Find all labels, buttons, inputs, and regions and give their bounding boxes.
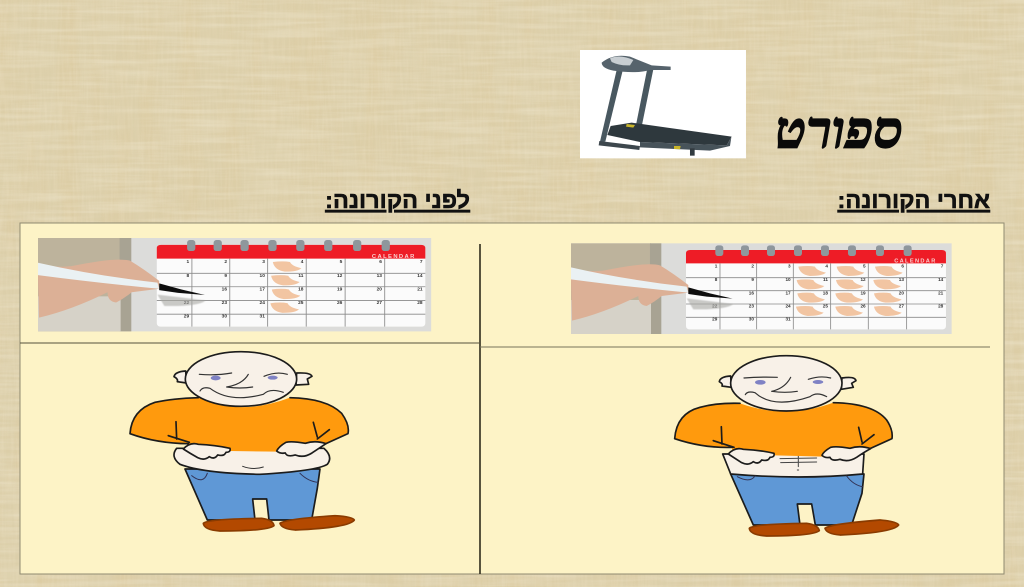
ears bbox=[719, 376, 731, 387]
calendar: after corona, many marked days: 13 bbox=[899, 277, 904, 282]
calendar: before corona, few marked days: 8 bbox=[186, 273, 189, 279]
calendar: after corona, many marked days: 29 bbox=[712, 317, 718, 322]
figure: man after corona, slim with abs bbox=[675, 356, 899, 536]
calendar: before corona, few marked days: 12 bbox=[337, 273, 343, 279]
calendar: before corona, few marked days: 4 bbox=[301, 259, 304, 265]
calendar: before corona, few marked days: 1 bbox=[186, 259, 189, 265]
calendar: before corona, few marked days: 7 bbox=[420, 259, 423, 265]
calendar: after corona, many marked days: 26 bbox=[860, 304, 866, 309]
heading: before corona: לפני הקורונה: bbox=[325, 187, 470, 213]
calendar: after corona, many marked days: 20 bbox=[899, 290, 904, 295]
calendar: after corona, many marked days: 10 bbox=[785, 277, 791, 282]
calendar: before corona, few marked days: 11 bbox=[298, 273, 304, 279]
calendar: after corona, many marked days: 7 bbox=[941, 264, 944, 269]
calendar: after corona, many marked days: 18 bbox=[823, 290, 828, 295]
calendar: before corona, few marked days: 2 bbox=[224, 259, 227, 265]
ears bbox=[174, 371, 187, 383]
calendar: before corona, few marked days: 27 bbox=[377, 300, 382, 306]
title: ספורט bbox=[775, 103, 903, 160]
jeans bbox=[185, 469, 320, 520]
calendar: before corona, few marked days: 21 bbox=[417, 287, 423, 293]
calendar: after corona, many marked days: 14 bbox=[938, 277, 944, 282]
calendar: after corona, many marked days: 27 bbox=[899, 304, 904, 309]
calendar: after corona, many marked days: 4 bbox=[825, 264, 828, 269]
calendar: after corona, many marked days: 19 bbox=[860, 290, 866, 295]
calendar: before corona, few marked days: 29 bbox=[184, 314, 189, 320]
calendar: before corona, few marked days: 20 bbox=[377, 287, 382, 293]
calendar: before corona, few marked days: 6 bbox=[379, 259, 382, 265]
calendar: after corona, many marked days: 16 bbox=[749, 290, 754, 295]
sweater bbox=[130, 398, 348, 452]
icon: treadmill photo bbox=[580, 50, 746, 158]
calendar: before corona, few marked days: 3 bbox=[262, 259, 265, 265]
head bbox=[731, 356, 842, 411]
shoes bbox=[203, 518, 274, 531]
calendar: before corona, few marked days: 10 bbox=[260, 273, 265, 279]
calendar: before corona, few marked days: 19 bbox=[337, 287, 343, 293]
calendar: after corona, many marked days: CALENDAR bbox=[894, 259, 937, 265]
hands bbox=[728, 449, 774, 464]
calendar: after corona, many marked days: 30 bbox=[749, 317, 754, 322]
bare belly bbox=[723, 454, 864, 477]
calendar: before corona, few marked days: 5 bbox=[340, 259, 343, 265]
calendar: before corona, few marked days: 9 bbox=[224, 273, 227, 279]
calendar: before corona, few marked days bbox=[38, 238, 431, 331]
calendar: before corona, few marked days: 28 bbox=[417, 300, 423, 306]
calendar: before corona, few marked days: 24 bbox=[260, 300, 265, 306]
figure: man before corona, round belly bbox=[130, 352, 354, 531]
calendar: after corona, many marked days: 17 bbox=[785, 290, 791, 295]
calendar: before corona, few marked days: 16 bbox=[222, 287, 227, 293]
head bbox=[185, 352, 297, 406]
heading: after corona: אחרי הקורונה: bbox=[838, 187, 990, 213]
calendar: after corona, many marked days: 5 bbox=[863, 264, 866, 269]
face bbox=[199, 373, 287, 398]
calendar: before corona, few marked days: CALENDAR bbox=[372, 254, 416, 260]
neck bbox=[228, 402, 260, 405]
calendar: after corona, many marked days: 31 bbox=[785, 317, 791, 322]
calendar: before corona, few marked days: 13 bbox=[377, 273, 382, 279]
calendar: before corona, few marked days: 14 bbox=[417, 273, 423, 279]
calendar: after corona, many marked days: 6 bbox=[901, 264, 904, 269]
calendar: after corona, many marked days: 23 bbox=[749, 304, 754, 309]
calendar: after corona, many marked days: 2 bbox=[751, 264, 754, 269]
shoes bbox=[749, 523, 819, 536]
calendar: after corona, many marked days bbox=[571, 243, 952, 334]
round belly bbox=[174, 448, 330, 474]
calendar: after corona, many marked days: 1 bbox=[715, 264, 718, 269]
calendar: before corona, few marked days: 23 bbox=[222, 300, 227, 306]
calendar: before corona, few marked days: 17 bbox=[260, 287, 265, 293]
hands bbox=[183, 444, 230, 459]
calendar: after corona, many marked days: 22 bbox=[712, 304, 718, 309]
calendar: after corona, many marked days: 3 bbox=[788, 264, 791, 269]
calendar: after corona, many marked days: 9 bbox=[751, 277, 754, 282]
calendar: before corona, few marked days: 25 bbox=[298, 300, 304, 306]
jeans bbox=[731, 474, 864, 525]
panel: comparison table bbox=[20, 223, 1004, 574]
face bbox=[744, 377, 831, 402]
calendar: before corona, few marked days: 18 bbox=[298, 287, 304, 293]
calendar: after corona, many marked days: 24 bbox=[785, 304, 791, 309]
calendar: before corona, few marked days: 26 bbox=[337, 300, 343, 306]
calendar: before corona, few marked days: 30 bbox=[222, 314, 227, 320]
calendar: after corona, many marked days: 28 bbox=[938, 304, 944, 309]
calendar: after corona, many marked days: 12 bbox=[860, 277, 866, 282]
calendar: after corona, many marked days: 21 bbox=[938, 290, 944, 295]
calendar: after corona, many marked days: 25 bbox=[823, 304, 828, 309]
calendar: before corona, few marked days: 22 bbox=[184, 300, 189, 306]
calendar: before corona, few marked days: 31 bbox=[260, 314, 265, 320]
sweater bbox=[675, 403, 892, 457]
calendar: after corona, many marked days: 8 bbox=[715, 277, 718, 282]
calendar: after corona, many marked days: 11 bbox=[823, 277, 828, 282]
